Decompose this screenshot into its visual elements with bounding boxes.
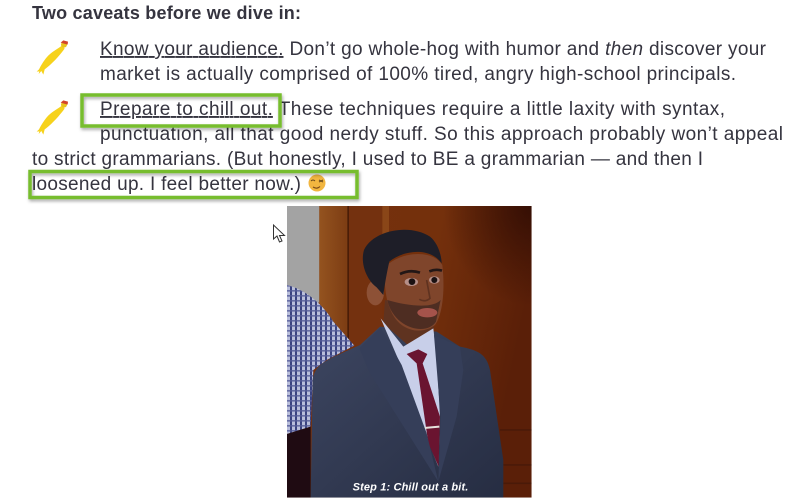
heading: Two caveats before we dive in: xyxy=(32,3,301,23)
icon: rubber chicken 2 xyxy=(37,100,68,135)
jacket lapels xyxy=(396,335,463,480)
wood door background xyxy=(287,206,532,498)
beard shadow xyxy=(387,300,441,329)
suit jacket xyxy=(311,327,503,498)
text: know your audience: Know your audience. Don’t go whole-hog with humor and then discover your xyxy=(100,39,767,60)
tie xyxy=(407,349,440,467)
icon: winking emoji xyxy=(308,174,326,192)
nose and mouth xyxy=(417,280,437,317)
text: prepare to chill out xyxy=(32,99,783,195)
icon: rubber chicken 1 xyxy=(37,40,68,75)
icon: mouse cursor xyxy=(274,225,284,242)
text: prepare to chill out: punctuation, all that good nerdy stuff. So this approach probably won’t appeal xyxy=(100,124,783,145)
face xyxy=(385,254,443,331)
shirt and collar xyxy=(381,318,440,467)
ear xyxy=(367,280,384,305)
text: know your audience xyxy=(100,39,767,85)
tie clip xyxy=(424,427,439,428)
neck xyxy=(384,300,434,344)
eyes and brows xyxy=(400,270,442,286)
highlight box: prepare to chill out xyxy=(82,95,280,126)
plaid shirt of bystander xyxy=(287,285,354,434)
text: prepare to chill out: loosened up. I feel better now.) xyxy=(32,174,301,195)
grey wall xyxy=(287,206,319,303)
hair xyxy=(363,230,442,295)
dark lower left xyxy=(287,427,311,498)
photo: man in suit, step 1 chill out a bit xyxy=(287,206,532,498)
caption: Step 1: Chill out a bit. xyxy=(353,482,468,494)
door frame xyxy=(319,206,532,483)
text: prepare to chill out: to strict grammarians. (But honestly, I used to BE a grammarian — and then I xyxy=(32,149,703,170)
text: prepare to chill out: Prepare to chill out. These techniques require a little laxity with syntax, xyxy=(100,99,725,120)
text: know your audience: market is actually comprised of 100% tired, angry high-school principals. xyxy=(100,64,736,85)
highlight box: loosened up xyxy=(30,172,357,198)
